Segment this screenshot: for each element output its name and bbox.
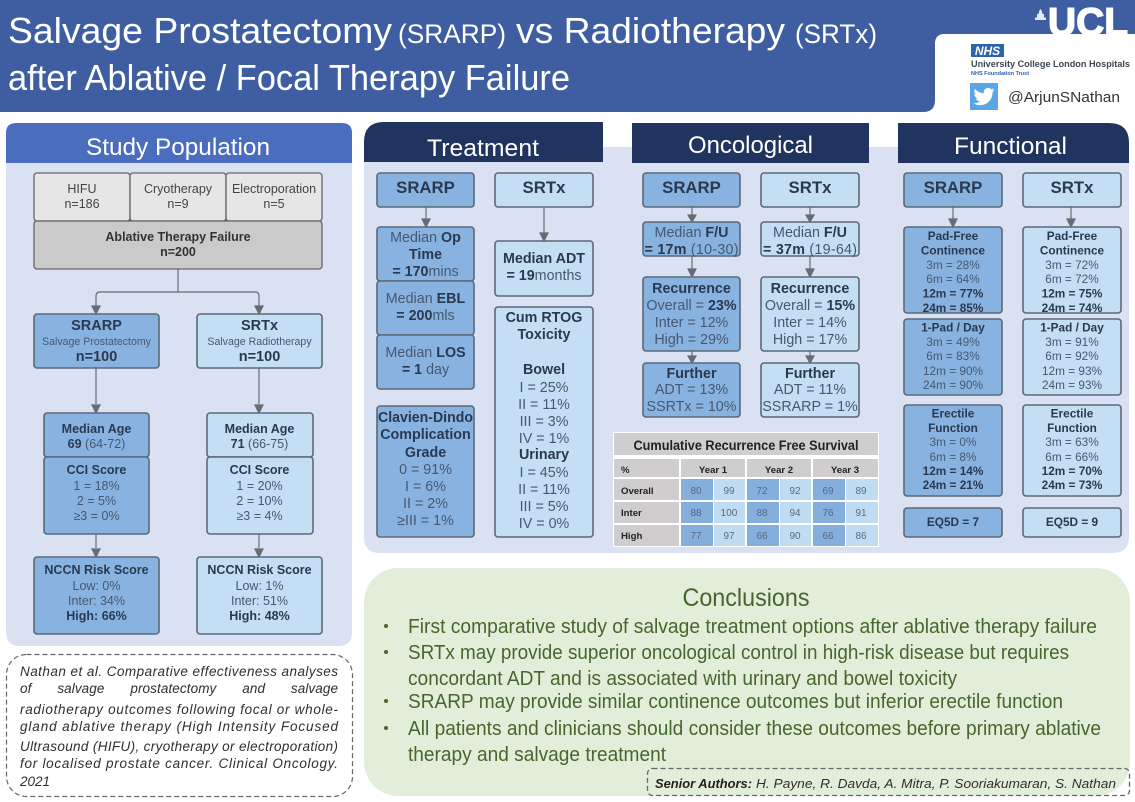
box: SRTx arm: SRTx xyxy=(241,318,278,334)
box: SRTx: SRTx xyxy=(1051,178,1094,197)
box: RTOG toxicity: I = 45% xyxy=(520,465,569,481)
box: SRTx pad-free continence: 6m = 72% xyxy=(1045,272,1099,286)
box: HIFU: n=186 xyxy=(64,197,100,211)
UCL logo: UCL xyxy=(1048,1,1128,44)
table: cumulative recurrence free survival: Year 3 xyxy=(831,465,859,476)
box: SRARP recurrence: High = 29% xyxy=(654,332,729,348)
table: cumulative recurrence free survival: High xyxy=(621,531,642,542)
box: median ADT: Median ADT xyxy=(503,251,585,267)
box: SRTx EQ5D: EQ5D = 9 xyxy=(1046,515,1098,529)
box: SRTx NCCN risk xyxy=(197,557,322,634)
box: SRTx 1-pad per day: 12m = 93% xyxy=(1042,364,1103,378)
box: SRTx 1-pad per day: 6m = 92% xyxy=(1045,349,1099,363)
table: cumulative recurrence free survival: 90 xyxy=(789,531,801,542)
box: SRTx further treatment: ADT = 11% xyxy=(774,382,846,398)
box: median op time: Time xyxy=(409,247,442,263)
box: SRARP recurrence: Overall = 23% xyxy=(646,298,737,314)
table: cumulative recurrence free survival: 77 xyxy=(690,531,702,542)
box: SRARP follow-up: = 17m (10-30) xyxy=(644,242,738,258)
box: electroporation: n=5 xyxy=(263,197,285,211)
bullet list: SRARP may provide similar continence outcomes but inferior erectile function xyxy=(408,691,1063,713)
box: SRARP EQ5D xyxy=(904,508,1002,537)
box: SRARP erectile function: 6m = 8% xyxy=(930,450,977,464)
box: median LOS xyxy=(377,335,474,389)
box: RTOG toxicity xyxy=(495,307,593,537)
box: SRARP erectile function xyxy=(904,405,1002,496)
box: SRARP NCCN risk xyxy=(34,557,159,634)
box: HIFU xyxy=(34,173,130,221)
box: SRTx erectile function: Function xyxy=(1047,421,1097,435)
panel: conclusions xyxy=(364,568,1130,796)
box: Clavien-Dindo: Grade xyxy=(405,445,446,461)
table: cumulative recurrence free survival: Cumulative Recurrence Free Survival xyxy=(634,438,858,453)
bullet list: SRTx may provide superior oncological control in high-risk disease but requires xyxy=(408,642,1069,664)
panel: treatment xyxy=(364,122,603,537)
table: cumulative recurrence free survival: % xyxy=(621,465,630,476)
box: Clavien-Dindo: I = 6% xyxy=(405,479,446,495)
box: SRARP further treatment xyxy=(643,363,740,417)
treatment arrowheads xyxy=(422,219,548,241)
panel: oncological xyxy=(613,123,879,547)
box: SRTx CCI score: 2 = 10% xyxy=(236,494,283,508)
box: SRARP pad-free continence xyxy=(904,227,1002,315)
table: cumulative recurrence free survival: 80 xyxy=(690,486,702,497)
box: SRARP CCI score: ≥3 = 0% xyxy=(73,509,120,523)
box: SRTx EQ5D xyxy=(1023,508,1121,537)
box: SRARP: SRARP xyxy=(396,178,455,197)
box: SRTx erectile function: 3m = 63% xyxy=(1045,435,1099,449)
citation box: radiotherapy outcomes following focal or whole- xyxy=(20,702,338,717)
box: SRARP erectile function: 12m = 14% xyxy=(923,464,984,478)
bullet list: therapy and salvage treatment xyxy=(408,744,666,766)
citation box: Ultrasound (HIFU), cryotherapy or electroporation) xyxy=(20,739,338,754)
box: median op time: Median Op xyxy=(390,230,461,246)
box: ablative therapy failure: n=200 xyxy=(160,245,196,259)
box: SRTx pad-free continence xyxy=(1023,227,1121,315)
box: RTOG toxicity: Cum RTOG xyxy=(506,310,582,326)
box: SRTx median age xyxy=(207,413,313,457)
functional arrows xyxy=(953,207,1071,219)
box: SRTx pad-free continence: 12m = 75% xyxy=(1042,286,1103,300)
box: SRARP erectile function: Erectile xyxy=(932,406,975,420)
table: cumulative recurrence free survival xyxy=(613,432,879,547)
box: SRTx pad-free continence: Pad-Free xyxy=(1047,229,1098,243)
box: SRARP xyxy=(904,173,1002,207)
box: Clavien-Dindo: Clavien-Dindo xyxy=(378,410,473,426)
box: SRTx further treatment: SSRARP = 1% xyxy=(762,399,858,415)
citation box: gland ablative therapy (High Intensity Focused xyxy=(20,719,338,734)
title: (SRARP) xyxy=(398,19,506,49)
box: SRARP 1-pad per day: 6m = 83% xyxy=(926,349,980,363)
icon: twitter xyxy=(970,83,998,110)
flow arrows xyxy=(96,269,259,548)
table: cumulative recurrence free survival: Inter xyxy=(621,508,642,519)
citation box: for localised prostate cancer. Clinical Oncology. xyxy=(20,756,338,771)
box: SRTx recurrence xyxy=(761,277,859,351)
box: SRARP recurrence: Inter = 12% xyxy=(655,315,729,331)
table: cumulative recurrence free survival: 66 xyxy=(756,531,768,542)
box: SRARP erectile function: Function xyxy=(928,421,978,435)
oncological arrowheads xyxy=(688,215,814,363)
box: SRTx 1-pad per day: 3m = 91% xyxy=(1045,335,1099,349)
table: cumulative recurrence free survival: 76 xyxy=(822,508,834,519)
heading: functional xyxy=(898,123,1129,163)
panel: functional xyxy=(898,123,1129,537)
bullet list: All patients and clinicians should consider these outcomes before primary ablative xyxy=(408,718,1101,740)
table: cumulative recurrence free survival: 94 xyxy=(789,508,801,519)
box: median EBL: = 200mls xyxy=(396,308,455,324)
box: SRARP arm: n=100 xyxy=(76,349,117,365)
box: SRARP pad-free continence: 3m = 28% xyxy=(926,258,980,272)
box: SRTx erectile function: 12m = 70% xyxy=(1042,464,1103,478)
box: RTOG toxicity: IV = 0% xyxy=(519,516,570,532)
box: SRTx pad-free continence: 24m = 74% xyxy=(1042,301,1103,315)
box: SRTx median age: 71 (66-75) xyxy=(231,437,288,451)
bullet list: concordant ADT and is associated with urinary and bowel toxicity xyxy=(408,668,957,690)
panel: study population xyxy=(6,123,352,646)
box: SRTx CCI score: CCI Score xyxy=(230,463,289,477)
table: cumulative recurrence free survival: 69 xyxy=(822,486,834,497)
arrowheads xyxy=(92,306,263,557)
box: SRARP pad-free continence: 24m = 85% xyxy=(923,301,984,315)
header banner xyxy=(0,0,1135,112)
box: SRTx further treatment: Further xyxy=(785,366,835,382)
box: SRTx recurrence: High = 17% xyxy=(773,332,847,348)
heading: oncological xyxy=(632,123,869,163)
senior authors box: H. Payne, R. Davda, A. Mitra, P. Sooriakumaran, S. Nathan xyxy=(756,776,1116,791)
heading: oncological: Oncological xyxy=(688,132,813,159)
NHS logo: NHS xyxy=(975,44,1000,58)
table: cumulative recurrence free survival: Overall xyxy=(621,486,654,497)
box: SRTx xyxy=(761,173,859,207)
table: cumulative recurrence free survival: 97 xyxy=(723,531,735,542)
functional arrowheads xyxy=(949,219,1075,227)
box: RTOG toxicity: I = 25% xyxy=(520,380,569,396)
table: cumulative recurrence free survival: 66 xyxy=(822,531,834,542)
box: SRTx xyxy=(495,173,593,207)
box: SRTx recurrence: Overall = 15% xyxy=(765,298,855,314)
box: SRARP CCI score xyxy=(44,457,149,534)
box: SRTx arm: Salvage Radiotherapy xyxy=(207,336,312,348)
title: Salvage Prostatectomy xyxy=(8,10,392,51)
box: SRTx erectile function: 6m = 66% xyxy=(1045,450,1099,464)
box: SRARP NCCN risk: High: 66% xyxy=(66,609,127,623)
table: cumulative recurrence free survival: 88 xyxy=(756,508,768,519)
box: SRARP xyxy=(643,173,740,207)
box: SRARP CCI score: CCI Score xyxy=(67,463,126,477)
heading: functional: Functional xyxy=(954,133,1067,160)
box: cryotherapy: Cryotherapy xyxy=(144,182,213,196)
box: median LOS: = 1 day xyxy=(402,362,450,378)
box: SRTx NCCN risk: Inter: 51% xyxy=(231,594,288,608)
box: SRARP pad-free continence: Continence xyxy=(921,244,986,258)
logos panel xyxy=(935,34,1135,112)
box: SRARP further treatment: SSRTx = 10% xyxy=(647,399,737,415)
heading: treatment xyxy=(364,122,603,162)
box: median ADT: = 19months xyxy=(506,268,582,284)
heading: study population xyxy=(6,123,352,163)
box: RTOG toxicity: Urinary xyxy=(519,447,569,463)
twitter handle: @ArjunSNathan xyxy=(1008,89,1120,106)
table: cumulative recurrence free survival: 88 xyxy=(690,508,702,519)
box: SRTx CCI score xyxy=(207,457,313,534)
hospital name: University College London Hospitals xyxy=(971,59,1130,69)
table: cumulative recurrence free survival: 100 xyxy=(721,508,738,519)
box: SRTx further treatment xyxy=(761,363,859,417)
box: ablative therapy failure: Ablative Therapy Failure xyxy=(105,230,251,244)
box: SRARP xyxy=(377,173,474,207)
table: cumulative recurrence free survival: 86 xyxy=(855,531,867,542)
box: SRTx erectile function: 24m = 73% xyxy=(1042,478,1103,492)
bullet list xyxy=(384,616,1101,766)
box: RTOG toxicity: Bowel xyxy=(523,362,565,378)
box: Clavien-Dindo: II = 2% xyxy=(403,496,448,512)
box: SRTx NCCN risk: High: 48% xyxy=(229,609,290,623)
box: SRARP 1-pad per day: 1-Pad / Day xyxy=(921,320,985,334)
title: after Ablative / Focal Therapy Failure xyxy=(8,57,570,98)
box: SRTx xyxy=(1023,173,1121,207)
box: median EBL: Median EBL xyxy=(386,291,465,307)
box: SRTx recurrence: Recurrence xyxy=(771,281,849,297)
panel: results background xyxy=(364,147,1129,553)
box: median EBL xyxy=(377,281,474,335)
box: SRARP median age: Median Age xyxy=(62,422,131,436)
box: SRTx NCCN risk: NCCN Risk Score xyxy=(207,563,312,577)
box: median ADT xyxy=(495,241,593,296)
box: SRARP erectile function: 3m = 0% xyxy=(930,435,977,449)
box: SRARP: SRARP xyxy=(924,178,982,197)
table: cumulative recurrence free survival: Year 2 xyxy=(765,465,793,476)
box: SRARP NCCN risk: Inter: 34% xyxy=(68,594,125,608)
box: SRTx erectile function xyxy=(1023,405,1121,496)
box: ablative therapy failure xyxy=(34,221,322,269)
box: RTOG toxicity: II = 11% xyxy=(518,482,570,498)
box: SRTx CCI score: ≥3 = 4% xyxy=(236,509,283,523)
table: cumulative recurrence free survival: 89 xyxy=(855,486,867,497)
box: RTOG toxicity: III = 5% xyxy=(520,499,569,515)
title: vs Radiotherapy xyxy=(516,10,785,51)
box: SRARP CCI score: 2 = 5% xyxy=(77,494,116,508)
box: SRARP 1-pad per day: 12m = 90% xyxy=(923,364,984,378)
box: SRTx follow-up: = 37m (19-64) xyxy=(763,242,857,258)
box: SRTx follow-up: Median F/U xyxy=(773,225,847,241)
box: Clavien-Dindo: Complication xyxy=(380,427,471,443)
box: SRTx median age: Median Age xyxy=(225,422,294,436)
box: SRARP NCCN risk: NCCN Risk Score xyxy=(44,563,149,577)
box: SRARP pad-free continence: Pad-Free xyxy=(928,229,979,243)
box: SRARP 1-pad per day: 3m = 49% xyxy=(926,335,980,349)
box: cryotherapy: n=9 xyxy=(167,197,189,211)
box: electroporation: Electroporation xyxy=(232,182,316,196)
table: cumulative recurrence free survival: 91 xyxy=(855,508,867,519)
citation box: Nathan et al. Comparative effectiveness analyses xyxy=(20,664,338,679)
box: SRARP follow-up: Median F/U xyxy=(655,225,728,241)
box: SRTx pad-free continence: 3m = 72% xyxy=(1045,258,1099,272)
box: SRTx 1-pad per day: 1-Pad / Day xyxy=(1040,320,1104,334)
heading: study population: Study Population xyxy=(86,134,270,161)
box: SRARP recurrence xyxy=(643,277,740,351)
box: median op time xyxy=(377,227,474,281)
oncological arrows xyxy=(692,207,810,356)
box: RTOG toxicity: Toxicity xyxy=(518,327,571,343)
box: SRARP median age xyxy=(44,413,149,457)
box: SRARP 1-pad per day: 24m = 90% xyxy=(923,378,984,392)
senior authors box xyxy=(648,768,1130,796)
title xyxy=(8,10,877,98)
box: SRARP NCCN risk: Low: 0% xyxy=(73,579,120,593)
box: median LOS: Median LOS xyxy=(385,345,466,361)
box: SRARP further treatment: Further xyxy=(666,366,717,382)
box: SRTx recurrence: Inter = 14% xyxy=(773,315,847,331)
treatment arrows xyxy=(426,207,544,233)
box: HIFU: HIFU xyxy=(67,182,97,196)
box: SRTx 1-pad per day: 24m = 93% xyxy=(1042,378,1103,392)
trust name: NHS Foundation Trust xyxy=(971,71,1029,77)
box: SRARP recurrence: Recurrence xyxy=(652,281,731,297)
box: SRARP arm xyxy=(34,314,159,368)
box: SRTx follow-up xyxy=(761,222,859,258)
citation box xyxy=(6,654,352,796)
box: SRTx CCI score: 1 = 20% xyxy=(236,479,283,493)
heading: conclusions: Conclusions xyxy=(682,584,810,612)
title: (SRTx) xyxy=(795,19,877,49)
box: SRTx pad-free continence: Continence xyxy=(1040,244,1105,258)
box: SRTx arm xyxy=(197,314,322,368)
box: SRARP median age: 69 (64-72) xyxy=(68,437,125,451)
citation box: of salvage prostatectomy and salvage xyxy=(20,681,338,696)
box: SRARP further treatment: ADT = 13% xyxy=(655,382,728,398)
bullet list: First comparative study of salvage treatment options after ablative therapy failure xyxy=(408,616,1097,638)
table: cumulative recurrence free survival: 99 xyxy=(723,486,735,497)
box: Clavien-Dindo: ≥III = 1% xyxy=(397,513,454,529)
box: SRTx NCCN risk: Low: 1% xyxy=(236,579,283,593)
heading: treatment: Treatment xyxy=(427,135,539,162)
box: SRARP: SRARP xyxy=(662,178,721,197)
box: Clavien-Dindo: 0 = 91% xyxy=(399,462,452,478)
box: SRTx erectile function: Erectile xyxy=(1051,406,1094,420)
box: RTOG toxicity: II = 11% xyxy=(518,397,570,413)
box: SRTx arm: n=100 xyxy=(239,349,280,365)
box: SRTx 1-pad per day xyxy=(1023,319,1121,395)
box: SRTx: SRTx xyxy=(523,178,566,197)
box: SRTx: SRTx xyxy=(789,178,832,197)
box: SRARP follow-up xyxy=(643,222,740,258)
box: electroporation xyxy=(226,173,322,221)
box: SRARP arm: Salvage Prostatectomy xyxy=(42,336,152,348)
box: SRARP arm: SRARP xyxy=(71,318,122,334)
table: cumulative recurrence free survival: 72 xyxy=(756,486,768,497)
box: SRARP 1-pad per day xyxy=(904,319,1002,395)
box: Clavien-Dindo xyxy=(377,406,474,537)
box: median op time: = 170mins xyxy=(392,264,459,280)
citation box: 2021 xyxy=(19,774,50,789)
senior authors box: Senior Authors: xyxy=(655,776,752,791)
box: SRARP erectile function: 24m = 21% xyxy=(923,478,984,492)
box: cryotherapy xyxy=(130,173,226,221)
box: SRARP CCI score: 1 = 18% xyxy=(73,479,120,493)
table: cumulative recurrence free survival: Year 1 xyxy=(699,465,728,476)
table: cumulative recurrence free survival: 92 xyxy=(789,486,801,497)
box: SRARP EQ5D: EQ5D = 7 xyxy=(927,515,979,529)
box: RTOG toxicity: IV = 1% xyxy=(519,431,570,447)
box: SRARP pad-free continence: 12m = 77% xyxy=(923,286,984,300)
box: RTOG toxicity: III = 3% xyxy=(520,414,569,430)
box: SRARP pad-free continence: 6m = 64% xyxy=(926,272,980,286)
